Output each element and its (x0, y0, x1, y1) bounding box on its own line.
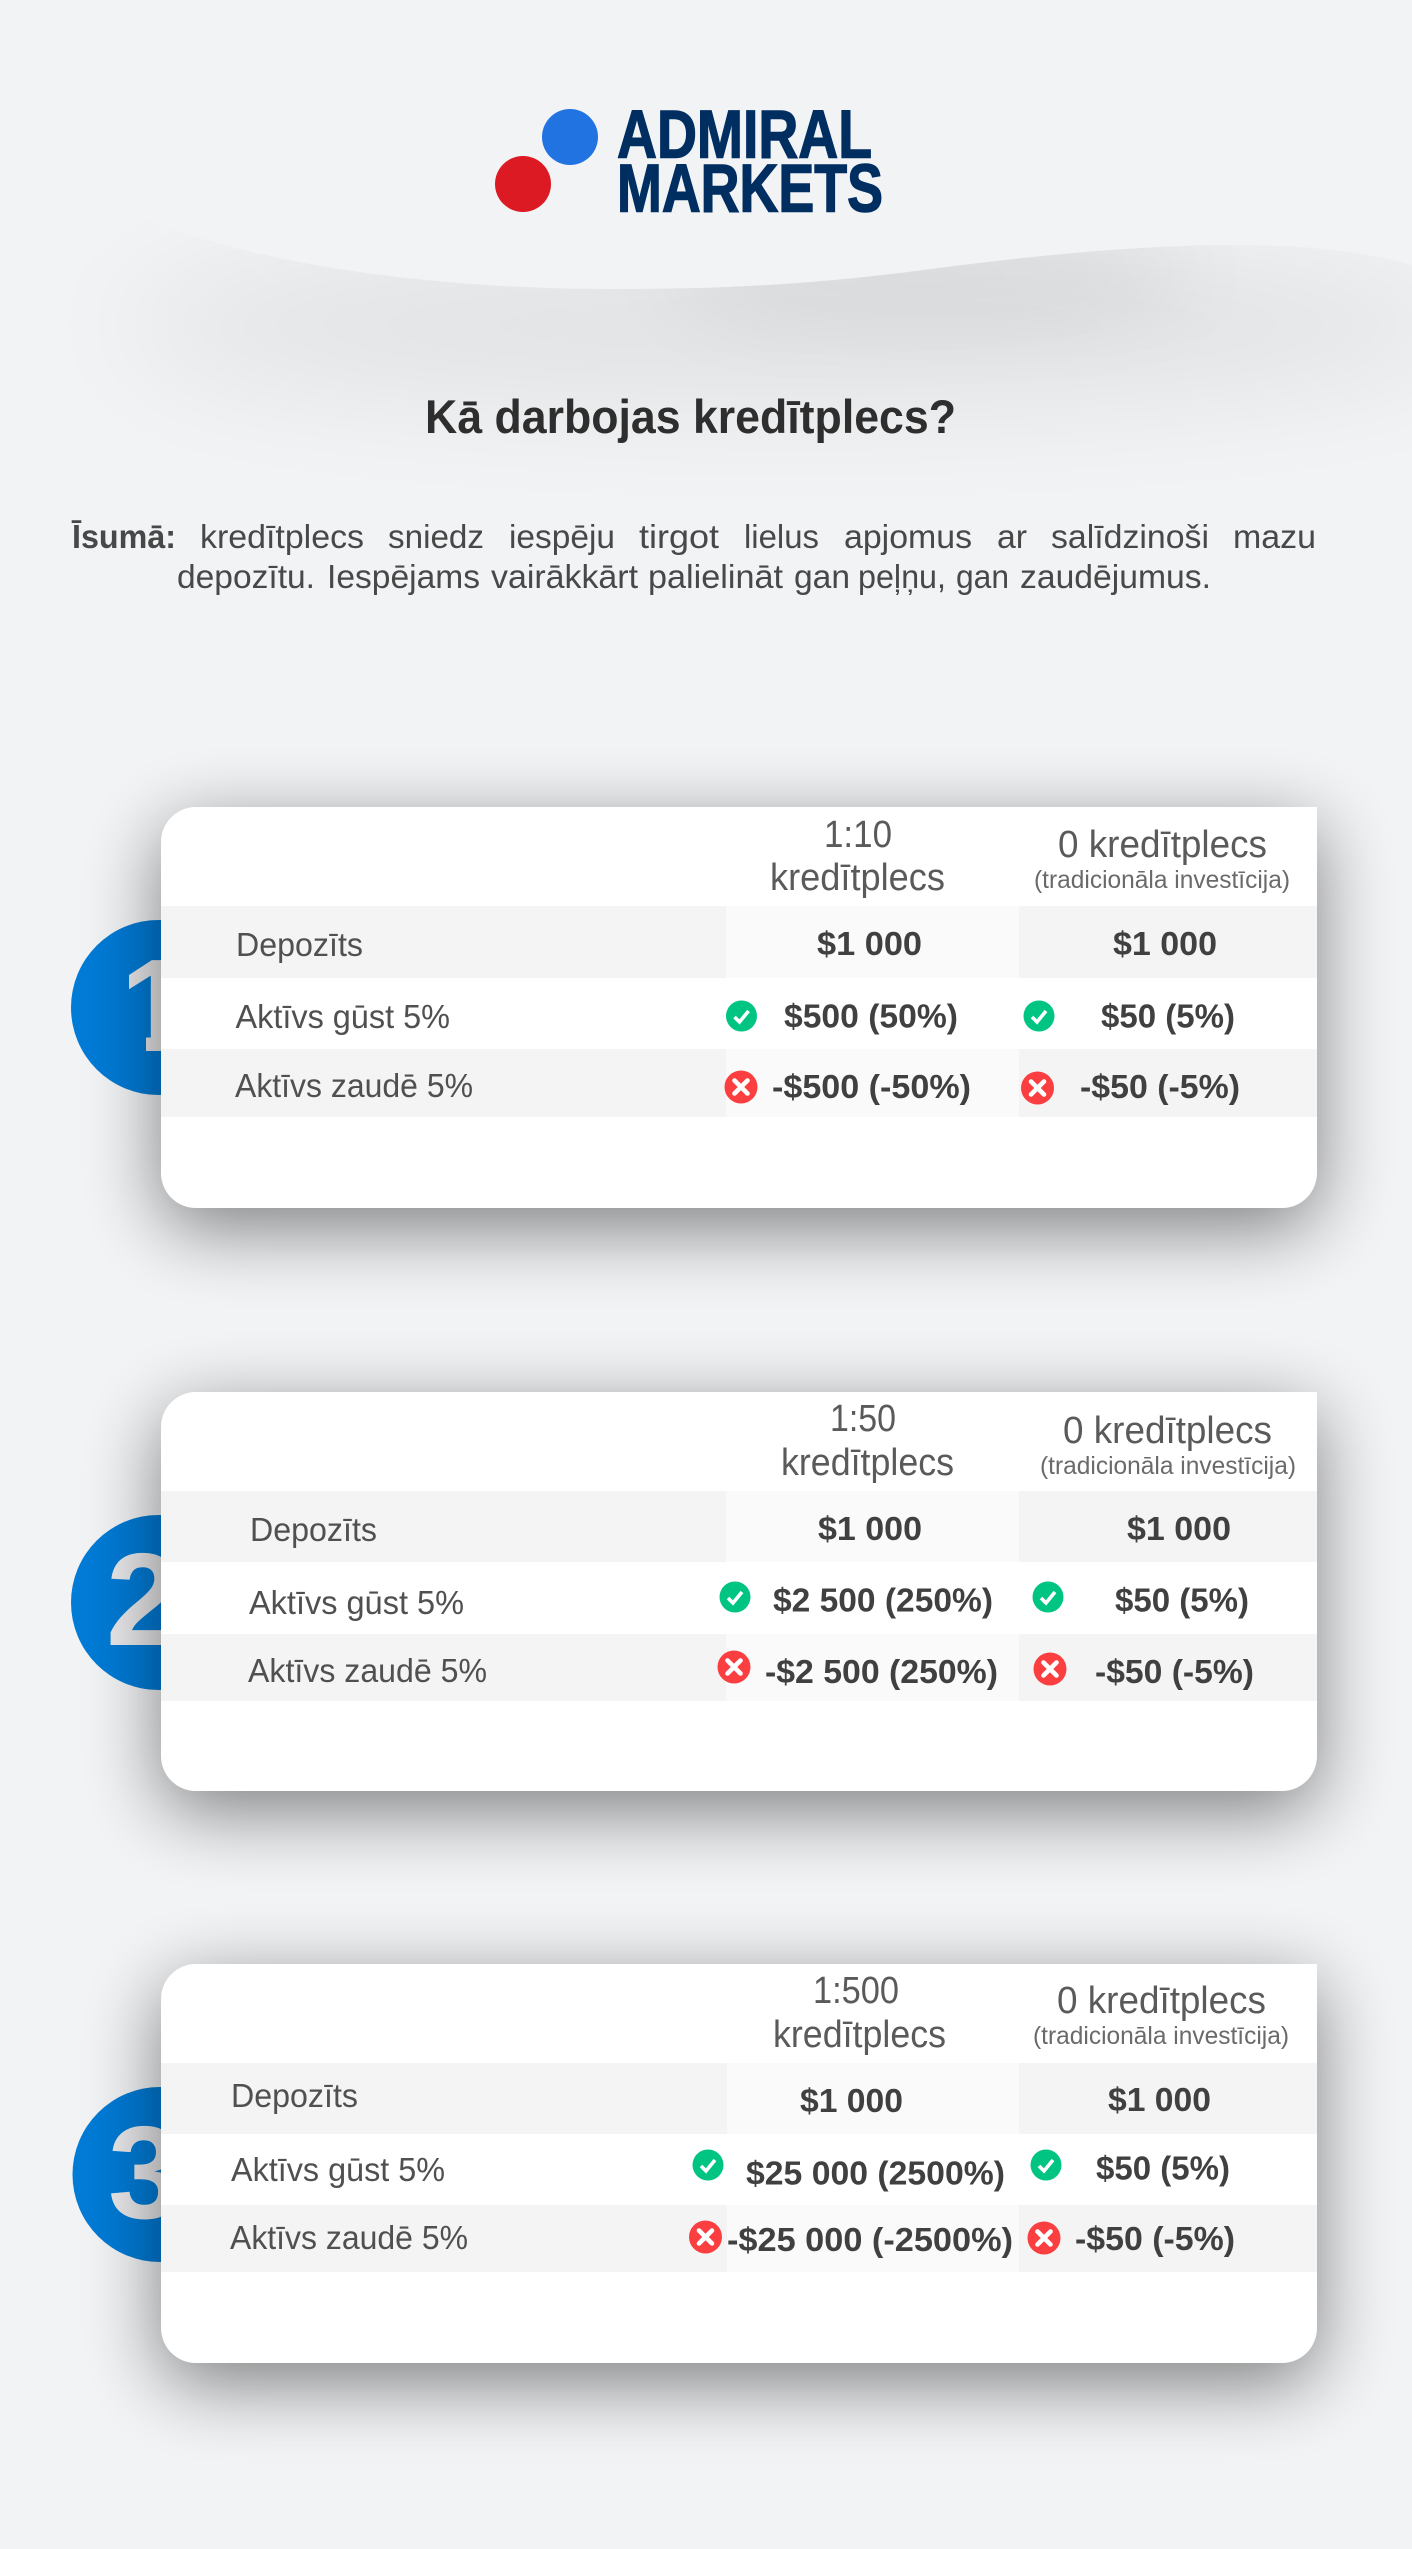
icon: blue dot (542, 109, 598, 165)
intro text: lielus (744, 518, 819, 555)
row labels: Aktīvs gūst 5% (249, 1584, 464, 1621)
intro text: sniedz (388, 518, 484, 555)
panel: leverage 1:500 (72, 1964, 1317, 2383)
table card (161, 1392, 1317, 1791)
row: loss values: -$50 (-5%) (1095, 1653, 1254, 1690)
column header: no leverage: 0 kredītplecs (1057, 1980, 1266, 2022)
intro text: depozītu. (177, 558, 315, 595)
intro text: gan (794, 558, 850, 595)
row labels: Aktīvs gūst 5% (231, 2151, 445, 2188)
column header: 1:10: 1:10 (824, 814, 892, 856)
intro text: Īsumā: (71, 518, 176, 555)
row: gain values (720, 1582, 1249, 1618)
row: gain values: $50 (5%) (1101, 998, 1235, 1034)
row labels (235, 926, 473, 1104)
row: loss values: -$2 500 (250%) (765, 1653, 998, 1690)
intro text (71, 518, 1316, 595)
row: gain values: $50 (5%) (1096, 2150, 1230, 2186)
row labels: Aktīvs zaudē 5% (248, 1652, 487, 1689)
column header: 1:10: kredītplecs (770, 857, 945, 899)
row: loss values (718, 1650, 1254, 1690)
intro text: zaudējumus. (1020, 558, 1211, 595)
row labels: Depozīts (236, 926, 363, 963)
row labels (230, 2077, 468, 2256)
row: loss values (689, 2220, 1235, 2258)
row: deposit values: $1 000 (817, 925, 922, 962)
row labels: Aktīvs zaudē 5% (230, 2219, 468, 2256)
intro text: palielināt (648, 558, 783, 595)
row labels: Aktīvs zaudē 5% (235, 1067, 473, 1104)
row: deposit values (817, 925, 1217, 962)
panel: leverage 1:50 (71, 1392, 1317, 1811)
number badge 1: 1 (120, 932, 193, 1079)
logo: Admiral Markets (495, 96, 883, 226)
number badge 1 (71, 920, 161, 1095)
column header: no leverage: (tradicionāla investīcija) (1033, 2022, 1289, 2050)
column header: 1:500: 1:500 (813, 1970, 899, 2012)
row: deposit values: $1 000 (800, 2082, 903, 2119)
column header: no leverage: 0 kredītplecs (1063, 1410, 1272, 1452)
row labels: Depozīts (231, 2077, 358, 2114)
intro text: gan (956, 558, 1009, 595)
intro text: Iespējams (327, 558, 480, 595)
number badge 3: 3 (108, 2099, 181, 2246)
number badge 2: 2 (106, 1526, 179, 1673)
row: deposit values (800, 2081, 1211, 2119)
column header: no leverage (1034, 824, 1290, 894)
column header: no leverage (1033, 1980, 1289, 2050)
table card (161, 807, 1317, 1208)
row labels: Depozīts (250, 1511, 377, 1548)
icon: red dot (495, 156, 551, 212)
column header: 1:500 (773, 1970, 946, 2056)
row: deposit values (818, 1510, 1231, 1547)
row labels: Aktīvs gūst 5% (236, 998, 450, 1035)
column header: 1:10 (770, 814, 945, 899)
intro text: vairākkārt (491, 558, 638, 595)
row: deposit values: $1 000 (1108, 2081, 1211, 2118)
column header: 1:50: kredītplecs (781, 1442, 954, 1484)
row: deposit values: $1 000 (1127, 1510, 1231, 1547)
intro text: iespēju (509, 518, 615, 555)
intro text: peļņu, (858, 558, 946, 595)
column header: 1:50 (781, 1398, 954, 1484)
row: gain values (726, 998, 1235, 1034)
intro text: apjomus (844, 518, 972, 555)
logo text: Admiral: ADMIRAL (617, 96, 872, 172)
column header: 1:500: kredītplecs (773, 2014, 946, 2056)
row: gain values (692, 2150, 1230, 2192)
row: loss values: -$50 (-5%) (1080, 1068, 1240, 1105)
row: deposit values: $1 000 (818, 1510, 922, 1547)
column header: no leverage: (tradicionāla investīcija) (1034, 866, 1290, 894)
row: loss values: -$25 000 (-2500%) (727, 2221, 1013, 2258)
column header: no leverage: (tradicionāla investīcija) (1040, 1452, 1296, 1480)
row: gain values: $500 (50%) (784, 998, 958, 1034)
table card (161, 1964, 1317, 2363)
intro text: salīdzinoši (1051, 518, 1209, 555)
intro text: mazu (1233, 518, 1316, 555)
number badge 2 (71, 1515, 246, 1690)
row: gain values: $50 (5%) (1115, 1582, 1249, 1618)
intro text: kredītplecs (200, 518, 364, 555)
column header: 1:50: 1:50 (830, 1398, 896, 1440)
row: loss values: -$50 (-5%) (1075, 2220, 1235, 2257)
column header: no leverage: 0 kredītplecs (1058, 824, 1267, 866)
intro text: ar (997, 518, 1027, 555)
row labels (248, 1511, 487, 1689)
logo text: Markets: MARKETS (617, 150, 883, 226)
row: gain values: $2 500 (250%) (773, 1582, 993, 1618)
intro text: tirgot (639, 518, 719, 555)
row: loss values (724, 1068, 1240, 1105)
panel: leverage 1:10 (71, 807, 1317, 1228)
column header: no leverage (1040, 1410, 1296, 1480)
title: Kā darbojas kredītplecs? (425, 390, 956, 443)
row: loss values: -$500 (-50%) (772, 1068, 971, 1105)
decorative wave with soft shadow (220, 246, 1378, 406)
row: deposit values: $1 000 (1113, 925, 1217, 962)
row: gain values: $25 000 (2500%) (746, 2154, 1005, 2192)
number badge 3 (72, 2087, 248, 2262)
